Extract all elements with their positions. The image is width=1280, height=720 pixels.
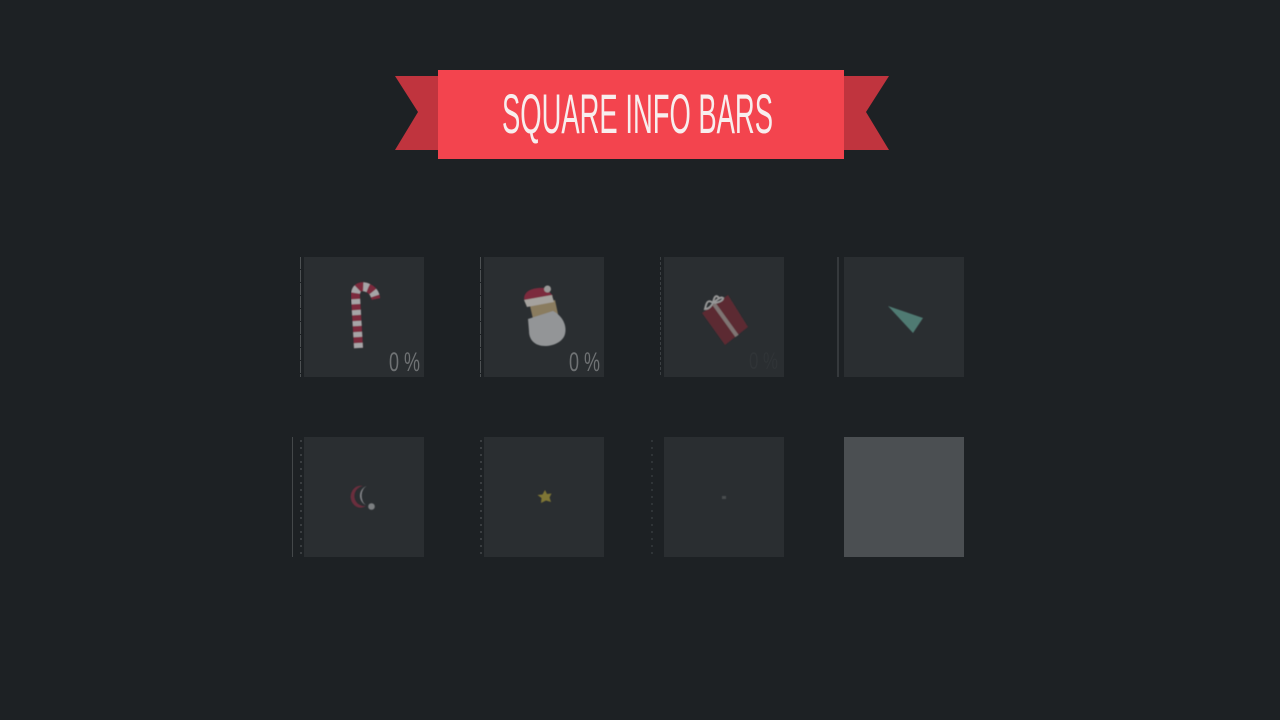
- ribbon right tail: [844, 76, 889, 150]
- icon: candy cane: [355, 287, 376, 348]
- panel: santa tile: [480, 257, 604, 377]
- icon: small dot: [722, 496, 726, 499]
- icon: gift: [702, 295, 748, 345]
- panel: gift tile: [660, 257, 784, 377]
- icon: star: [538, 490, 552, 503]
- title ribbon: [395, 70, 889, 159]
- panel: star tile: [481, 437, 604, 557]
- ribbon left tail: [395, 76, 438, 150]
- panel: blank light tile: [844, 437, 964, 557]
- panel: candy cane tile: [300, 257, 424, 377]
- icon: santa: [524, 286, 566, 346]
- icon: crescent: [351, 486, 375, 510]
- percent label: 0 %: [389, 347, 420, 377]
- title ribbon: SQUARE INFO BARS: [502, 82, 773, 145]
- icon: tree: [888, 306, 923, 333]
- percent label: 0 %: [569, 347, 600, 377]
- panel: dot tile: [652, 437, 784, 557]
- panel: tree tile: [838, 257, 964, 377]
- percent label: 0 %: [749, 348, 778, 375]
- ribbon main band: [438, 70, 844, 159]
- panel: bauble tile: [292, 437, 424, 557]
